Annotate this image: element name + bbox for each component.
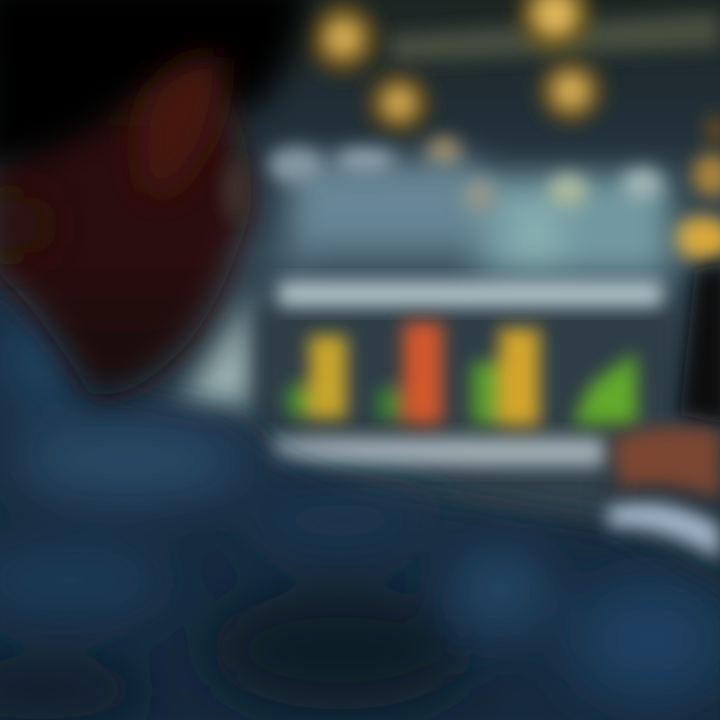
group 2 — [378, 388, 400, 420]
hair — [0, 0, 305, 170]
ceiling lights — [307, 0, 720, 260]
group 3 — [472, 362, 500, 424]
tablet — [258, 281, 678, 530]
bar chart — [288, 322, 638, 426]
tablet body — [258, 305, 678, 470]
ear — [138, 56, 225, 194]
tablet lower edge — [350, 470, 610, 530]
ceiling beam — [390, 12, 720, 62]
hand — [612, 427, 720, 500]
sleeve cuff — [605, 502, 720, 560]
group 1 — [288, 385, 312, 417]
header band — [278, 281, 663, 307]
footer band — [270, 437, 605, 467]
cheek — [223, 160, 247, 220]
head: face and neck — [0, 60, 248, 395]
jacket shading — [0, 310, 720, 720]
left nape glow — [0, 195, 45, 255]
dark device at right — [680, 262, 720, 425]
group 4 — [572, 352, 638, 424]
bright light behind shoulder — [175, 290, 252, 412]
window panels behind the tablet — [290, 160, 670, 275]
window highlights — [267, 147, 662, 211]
jacket: person's blue jacket — [0, 265, 720, 720]
